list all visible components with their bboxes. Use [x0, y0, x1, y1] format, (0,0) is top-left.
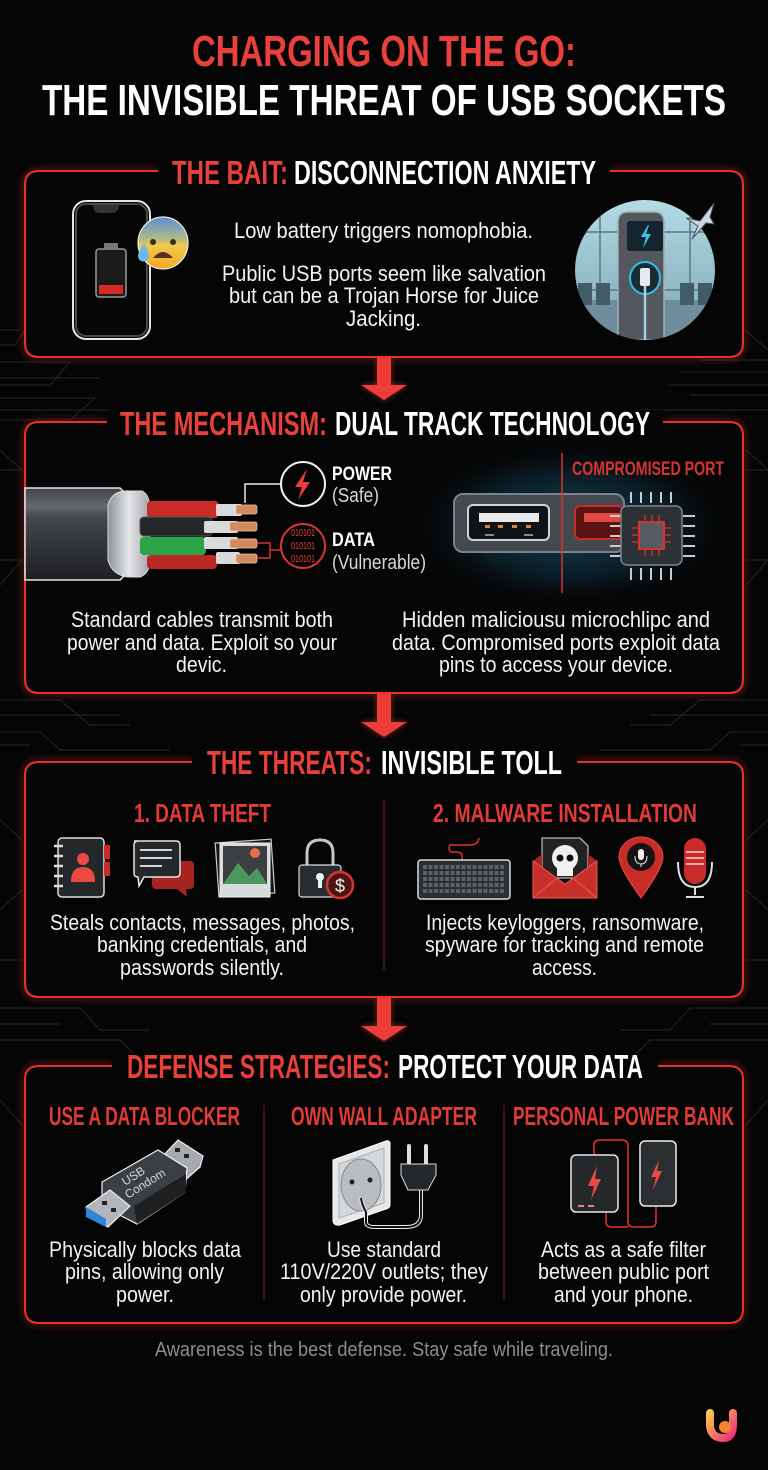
callout: power safe: POWER	[332, 464, 392, 485]
icon: microphone	[678, 838, 712, 897]
text: port explanation: data. Compromised ports exploit data	[392, 630, 721, 655]
text: data blocker: Physically blocks data	[49, 1237, 242, 1262]
heading: the mechanism: THE MECHANISM:	[120, 405, 327, 442]
arrow: bait to mechanism	[361, 358, 407, 400]
text: cable explanation: power and data. Exploit so your	[67, 630, 337, 655]
icon: wall outlet and plug	[333, 1141, 436, 1227]
icon: USB data blocker: USB	[119, 1164, 148, 1189]
title: CHARGING ON THE GO:	[192, 27, 576, 76]
icon: phone with low battery	[73, 201, 150, 339]
text: wall adapter	[280, 1237, 488, 1307]
subheading: data blocker: USE A DATA BLOCKER	[49, 1101, 240, 1131]
callout: data vulnerable: 010101	[291, 528, 315, 539]
heading: the threats: THE THREATS:	[207, 744, 372, 781]
heading: defense strategies: DEFENSE STRATEGIES:	[127, 1048, 390, 1085]
icon: location pin with microphone	[619, 837, 663, 898]
subheading: data theft: 1. DATA THEFT	[134, 798, 271, 828]
text: malware installation	[425, 910, 704, 980]
icon: lock with dollar: $	[335, 876, 345, 896]
callout: data vulnerable: 010101	[291, 554, 315, 565]
text: power bank: and your phone.	[554, 1282, 693, 1307]
text: data theft: passwords silently.	[120, 955, 284, 980]
text: bait description: Low battery triggers nomophobia.	[234, 218, 533, 243]
text: power bank: Acts as a safe filter	[541, 1237, 706, 1262]
heading: the bait: THE BAIT:	[172, 154, 288, 191]
text: port explanation	[392, 607, 721, 677]
panel: the mechanism	[25, 405, 743, 693]
icon: USB data blocker	[86, 1140, 203, 1227]
heading: the bait: DISCONNECTION ANXIETY	[294, 154, 596, 191]
subheading: wall adapter: OWN WALL ADAPTER	[291, 1101, 477, 1131]
text: bait description	[222, 218, 546, 331]
text: wall adapter: Use standard	[327, 1237, 441, 1262]
illustration: cable cross-section	[25, 488, 257, 580]
text: port explanation: Hidden maliciousu microchlipc and	[402, 607, 710, 632]
text: port explanation: pins to access your device.	[439, 652, 673, 677]
panel: the bait	[25, 154, 743, 357]
arrow: mechanism to threats	[361, 694, 407, 737]
title	[42, 27, 726, 125]
heading: the threats: INVISIBLE TOLL	[381, 744, 562, 781]
icon: chat bubbles	[134, 841, 194, 897]
panel: defense strategies	[25, 1048, 743, 1323]
text: malware installation: spyware for tracking and remote	[425, 932, 704, 957]
text: power bank	[538, 1237, 709, 1307]
callout: data vulnerable: DATA	[332, 530, 375, 551]
icon: skull envelope	[533, 838, 597, 898]
text: data theft: Steals contacts, messages, photos,	[50, 910, 355, 935]
text: wall adapter: 110V/220V outlets; they	[280, 1259, 488, 1284]
text: bait description: but can be a Trojan Horse for Juice	[229, 283, 539, 308]
heading: the bait	[172, 154, 596, 191]
icon: airport charging station	[575, 200, 715, 340]
heading: defense strategies: PROTECT YOUR DATA	[398, 1048, 643, 1085]
panel: the threats	[25, 744, 743, 997]
footer note: Awareness is the best defense. Stay safe while traveling.	[155, 1339, 613, 1361]
text: wall adapter: only provide power.	[300, 1282, 467, 1307]
icon: lock with dollar	[299, 840, 353, 898]
icon: keyboard with cord	[418, 838, 510, 899]
logo	[710, 1413, 733, 1438]
text: bait description: Jacking.	[346, 306, 421, 331]
callout: power safe	[245, 462, 392, 507]
icon: USB data blocker: Condom	[122, 1166, 168, 1202]
icon: power bank and phone	[571, 1140, 676, 1227]
text: data blocker	[49, 1237, 242, 1307]
callout: data vulnerable: 010101	[291, 541, 315, 552]
icon: photos	[215, 839, 275, 897]
heading: the mechanism	[120, 405, 650, 442]
callout: power safe: (Safe)	[332, 485, 379, 507]
text: malware installation: Injects keyloggers, ransomware,	[426, 910, 704, 935]
heading: the threats	[207, 744, 562, 781]
illustration: compromised USB port	[415, 445, 725, 605]
text: malware installation: access.	[532, 955, 597, 980]
text: cable explanation: devic.	[176, 652, 227, 677]
callout: data vulnerable	[257, 524, 426, 574]
icon: contact book	[54, 838, 110, 897]
text: data theft	[50, 910, 355, 980]
text: cable explanation	[67, 607, 337, 677]
text: data blocker: power.	[116, 1282, 174, 1307]
text: data blocker: pins, allowing only	[65, 1259, 224, 1284]
callout: data vulnerable: (Vulnerable)	[332, 552, 426, 574]
text: data theft: banking credentials, and	[97, 932, 307, 957]
text: cable explanation: Standard cables transmit both	[71, 607, 333, 632]
icon: worried face emoji	[138, 217, 188, 269]
text: bait description: Public USB ports seem like salvation	[222, 261, 546, 286]
arrow: threats to defense	[361, 998, 407, 1041]
text: power bank: between public port	[538, 1259, 709, 1284]
